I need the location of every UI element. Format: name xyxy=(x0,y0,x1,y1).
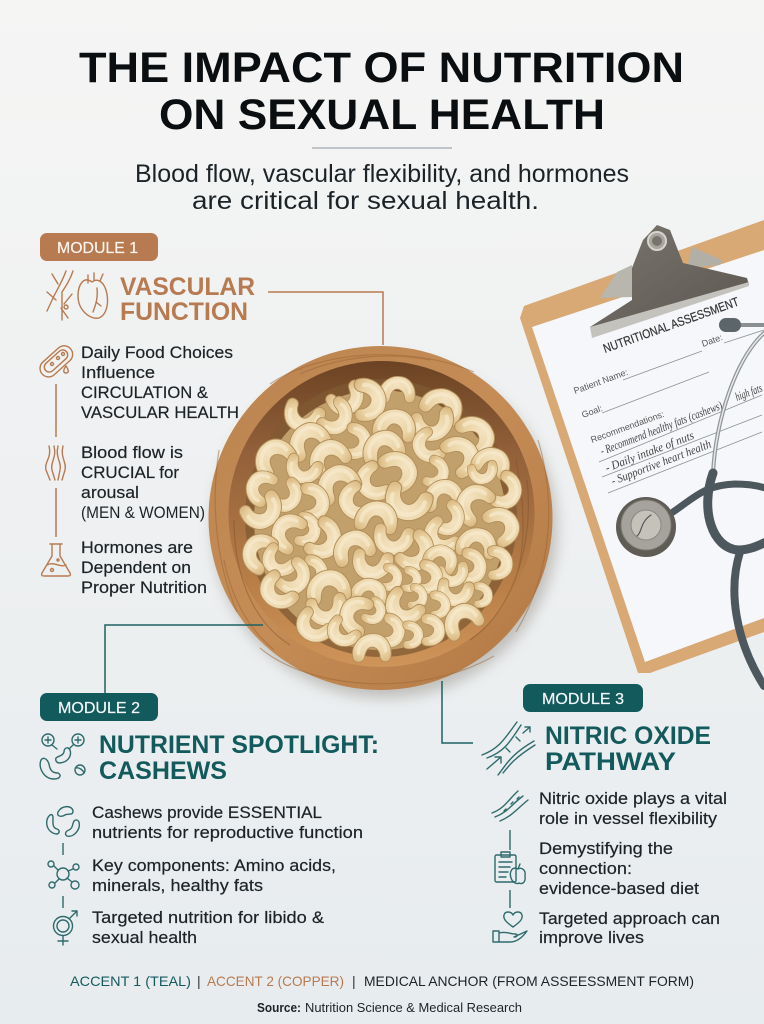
text: targeted approach: improve lives xyxy=(539,928,644,947)
legend footer: ACCENT 1 (TEAL) xyxy=(70,973,191,989)
subtitle xyxy=(135,160,629,215)
text: daily food choices: CIRCULATION & xyxy=(81,383,209,402)
icon: gender symbols xyxy=(54,911,77,945)
text: blood flow: (MEN & WOMEN) xyxy=(81,503,205,522)
heading: nitric oxide pathway: NITRIC OXIDE xyxy=(545,722,711,750)
text: blood flow: arousal xyxy=(81,483,139,502)
text: demystifying: evidence-based diet xyxy=(539,879,699,898)
assessment form text: Date: xyxy=(700,332,724,349)
text: essential nutrients: nutrients for reproductive function xyxy=(92,823,363,842)
text: demystifying: Demystifying the xyxy=(539,839,673,858)
heading: nutrient spotlight cashews: CASHEWS xyxy=(99,757,227,785)
heading: nutrient spotlight cashews xyxy=(99,731,379,785)
title: THE IMPACT OF NUTRITION xyxy=(79,44,684,92)
icon: molecule xyxy=(48,861,79,889)
text: demystifying xyxy=(539,839,699,898)
assessment form text: Goal: xyxy=(580,403,604,420)
assessment form text: Recommendations: xyxy=(589,409,666,445)
icon: vessel pathway xyxy=(482,722,535,775)
text: daily food choices: VASCULAR HEALTH xyxy=(81,403,239,422)
assessment form text: NUTRITIONAL ASSESSMENT xyxy=(601,295,741,356)
text: hormones: Proper Nutrition xyxy=(81,578,207,597)
text: hormones: Dependent on xyxy=(81,558,191,577)
bowl shadow xyxy=(213,358,557,698)
connector: module 1 xyxy=(268,292,383,345)
assessment form text xyxy=(572,295,764,493)
text: essential nutrients: Cashews provide ESSENTIAL xyxy=(92,803,322,822)
text: blood flow xyxy=(81,443,205,522)
module 3 badge: MODULE 3 xyxy=(542,691,624,708)
subtitle: are critical for sexual health. xyxy=(192,187,539,215)
text: daily food choices: Influence xyxy=(81,363,155,382)
assessment form text: - Supportive heart health xyxy=(609,437,713,488)
text: demystifying: connection: xyxy=(539,859,632,878)
connector: module 2 xyxy=(105,625,263,693)
module 2 badge: MODULE 2 xyxy=(58,700,140,717)
panel: module 2 nutrient spotlight xyxy=(40,693,379,947)
icon: vessels and heart xyxy=(47,271,108,320)
legend footer: ACCENT 2 (COPPER) xyxy=(207,973,344,989)
text: nitric oxide: role in vessel flexibility xyxy=(539,809,718,828)
icon: clipboard and apple xyxy=(495,852,525,883)
icon: cashew nutrients xyxy=(40,734,85,779)
legend footer: | xyxy=(197,973,201,989)
text: daily food choices: Daily Food Choices xyxy=(81,343,233,362)
text: key components: minerals, healthy fats xyxy=(92,876,263,895)
panel: module 1 vascular function xyxy=(37,233,255,597)
legend footer: | xyxy=(352,973,356,989)
source line: Source: xyxy=(257,1001,301,1015)
title xyxy=(79,44,684,139)
text: targeted nutrition: sexual health xyxy=(92,928,197,947)
text: targeted nutrition xyxy=(92,908,325,947)
stethoscope xyxy=(616,318,764,686)
title: ON SEXUAL HEALTH xyxy=(159,91,605,139)
icon: flask xyxy=(42,544,70,576)
heading: nutrient spotlight cashews: NUTRIENT SPOTLIGHT: xyxy=(99,731,379,759)
text: key components xyxy=(92,856,336,895)
heading: vascular function xyxy=(120,273,255,326)
icon: heart in hand xyxy=(493,912,527,942)
text: hormones: Hormones are xyxy=(81,538,193,557)
bowl of cashews xyxy=(208,346,552,690)
module 1 badge xyxy=(40,233,158,261)
text: targeted approach xyxy=(539,909,720,947)
heading: vascular function: FUNCTION xyxy=(120,298,248,326)
text: targeted nutrition: Targeted nutrition for libido & xyxy=(92,908,325,927)
module 3 badge xyxy=(523,684,643,712)
text: blood flow: CRUCIAL for xyxy=(81,463,179,482)
text: key components: Key components: Amino acids, xyxy=(92,856,336,875)
text: daily food choices xyxy=(81,343,239,422)
assessment form text: - Daily intake of nuts xyxy=(603,428,696,475)
icon: blood flow xyxy=(46,446,65,480)
text: essential nutrients xyxy=(92,803,363,842)
icon: blood vessel xyxy=(37,342,76,380)
heading: vascular function: VASCULAR xyxy=(120,273,255,301)
text: nitric oxide: Nitric oxide plays a vital xyxy=(539,789,727,808)
legend footer xyxy=(70,973,694,989)
module 1 badge: MODULE 1 xyxy=(57,240,138,257)
connector: module 3 xyxy=(442,681,473,743)
module 2 badge xyxy=(40,693,158,721)
assessment form text: Patient Name: xyxy=(572,367,629,396)
subtitle: Blood flow, vascular flexibility, and hormones xyxy=(135,160,629,188)
legend footer: MEDICAL ANCHOR (FROM ASSEESSMENT FORM) xyxy=(364,973,694,989)
text: blood flow: Blood flow is xyxy=(81,443,183,462)
cashews xyxy=(234,376,529,662)
panel: module 3 nitric oxide pathway xyxy=(482,684,727,947)
heading: nitric oxide pathway xyxy=(545,722,711,776)
icon: cashews xyxy=(47,807,79,836)
icon: vessel xyxy=(492,791,528,821)
heading: nitric oxide pathway: PATHWAY xyxy=(545,748,676,776)
metal clip xyxy=(590,225,749,338)
text: hormones xyxy=(81,538,207,597)
text: nitric oxide xyxy=(539,789,727,828)
text: targeted approach: Targeted approach can xyxy=(539,909,720,928)
source line: Nutrition Science & Medical Research xyxy=(305,1001,522,1015)
clipboard with nutritional assessment xyxy=(520,220,764,673)
